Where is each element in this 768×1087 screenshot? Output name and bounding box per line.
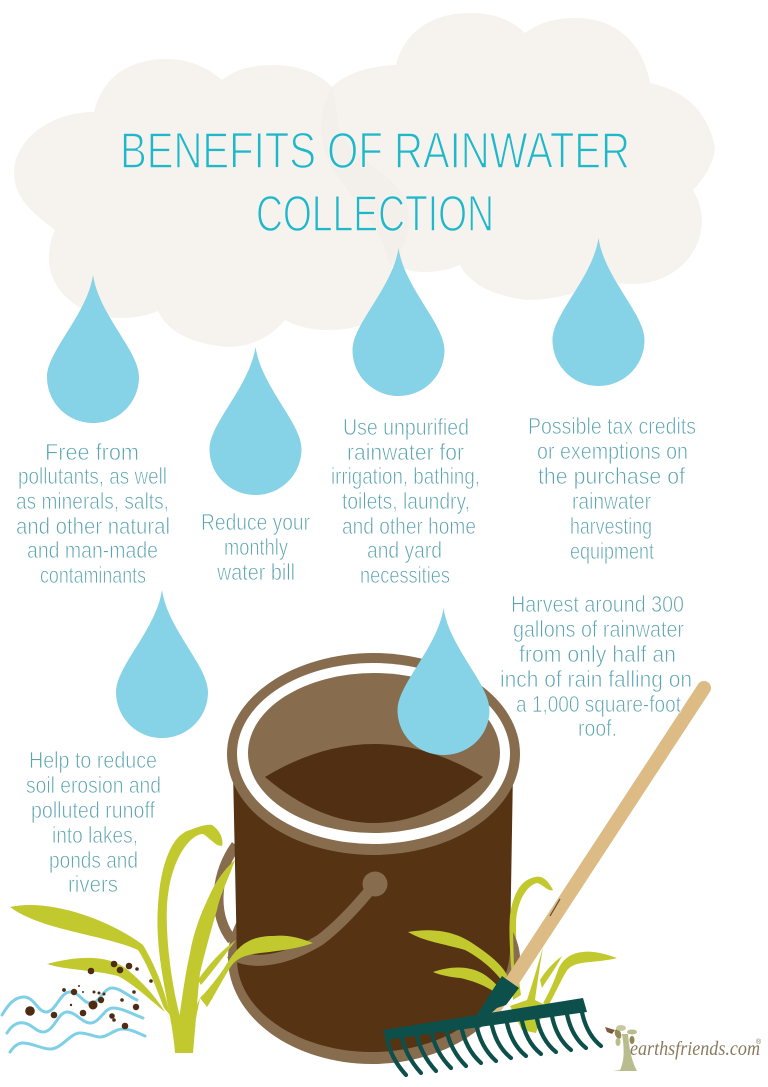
text: harvest 300 gallons: a 1,000 square-foot (516, 691, 681, 717)
text: free from pollutants: Free from (45, 439, 139, 465)
short leaf over bucket (433, 967, 499, 993)
bucket handle loop (219, 845, 236, 940)
bucket interior (248, 673, 500, 833)
dirt particles (25, 961, 153, 1029)
title: BENEFITS OF RAINWATER (120, 122, 630, 179)
center blade and stem (510, 947, 545, 1033)
text: free from pollutants: and man-made (27, 537, 158, 563)
text: reduce soil erosion (26, 747, 161, 897)
text: free from pollutants: pollutants, as well (18, 463, 167, 489)
text: reduce water bill: Reduce your (201, 509, 310, 535)
polluted water waves (2, 988, 145, 1052)
text: unpurified rainwater uses: rainwater for (347, 439, 464, 465)
drop 6 (398, 608, 490, 755)
text: free from pollutants: as minerals, salts, (16, 488, 169, 514)
text: harvest 300 gallons: inch of rain falling on (500, 666, 692, 692)
text: tax credits: rainwater (572, 488, 651, 514)
long leaf over bucket (408, 930, 507, 985)
text: unpurified rainwater uses: irrigation, bathing, (331, 463, 480, 489)
right leaf (184, 936, 313, 1053)
rake handle (492, 688, 704, 1012)
small right leaf (198, 940, 236, 985)
text: unpurified rainwater uses: and other home (342, 513, 476, 539)
text: free from pollutants (16, 439, 170, 588)
text: tax credits: harvesting (570, 513, 652, 539)
center rising leaf (175, 860, 235, 1053)
text: free from pollutants: and other natural (16, 513, 170, 539)
rim white ring (237, 663, 510, 844)
text: harvest 300 gallons: from only half an (519, 641, 676, 667)
text: unpurified rainwater uses: Use unpurified (343, 414, 469, 440)
logo tree (605, 1025, 637, 1071)
text: reduce soil erosion: polluted runoff (31, 797, 156, 823)
brown sliver (513, 932, 520, 968)
bucket rim (227, 653, 520, 855)
registered mark: ® (756, 1038, 762, 1046)
text: tax credits: Possible tax credits (528, 413, 696, 439)
rake tines (387, 1007, 601, 1075)
left plant (10, 825, 313, 1053)
water inside bucket (265, 744, 483, 823)
drop 4 (552, 238, 644, 386)
right leaf (543, 952, 617, 1006)
title (120, 122, 630, 242)
text: harvest 300 gallons: roof. (578, 715, 617, 741)
cloud background (14, 13, 715, 347)
title: COLLECTION (256, 185, 494, 242)
text: harvest 300 gallons: Harvest around 300 (511, 591, 684, 617)
text: tax credits: or exemptions on (537, 438, 688, 464)
text: unpurified rainwater uses: and yard (367, 537, 442, 563)
logo: earthsfriends.com (605, 1025, 762, 1071)
bucket body (233, 770, 513, 1052)
text: reduce soil erosion: ponds and (49, 847, 138, 873)
text: reduce water bill: water bill (216, 559, 295, 585)
drop 1 (47, 275, 139, 423)
text: tax credits: the purchase of (538, 463, 686, 489)
drop 2 (210, 347, 302, 495)
text: reduce soil erosion: rivers (68, 871, 118, 897)
wave 2 (7, 1008, 143, 1033)
text: unpurified rainwater uses: toilets, laundry, (342, 488, 470, 514)
text: reduce soil erosion: Help to reduce (29, 747, 157, 773)
bucket front band (230, 884, 375, 960)
tall curled leaf (157, 825, 223, 1053)
water drops (47, 238, 644, 755)
curled leaf (509, 877, 553, 1000)
text: unpurified rainwater uses (331, 414, 480, 588)
bucket (219, 653, 520, 1064)
bucket knob (362, 872, 388, 896)
long left leaf (10, 905, 170, 1015)
bucket bottom rim (228, 852, 516, 1064)
short left leaf (47, 958, 172, 1025)
text: tax credits (528, 413, 696, 564)
wave 1 (2, 988, 137, 1015)
drop 5 (116, 590, 208, 738)
text: unpurified rainwater uses: necessities (360, 562, 450, 588)
text: tax credits: equipment (570, 538, 654, 564)
text: reduce water bill (201, 509, 310, 585)
rake (383, 688, 704, 1075)
rake head bar (383, 998, 587, 1040)
small leaf (540, 956, 562, 988)
drop 3 (352, 248, 444, 396)
handle maker mark (550, 899, 560, 916)
ferrule (477, 976, 519, 1016)
text: free from pollutants: contaminants (40, 562, 146, 588)
text: reduce soil erosion: into lakes, (52, 822, 138, 848)
wave 3 (10, 1029, 145, 1052)
text: reduce water bill: monthly (224, 534, 288, 560)
text: harvest 300 gallons (500, 591, 692, 741)
right plant (408, 877, 617, 1033)
text: harvest 300 gallons: gallons of rainwater (513, 616, 684, 642)
text: reduce soil erosion: soil erosion and (26, 772, 161, 798)
